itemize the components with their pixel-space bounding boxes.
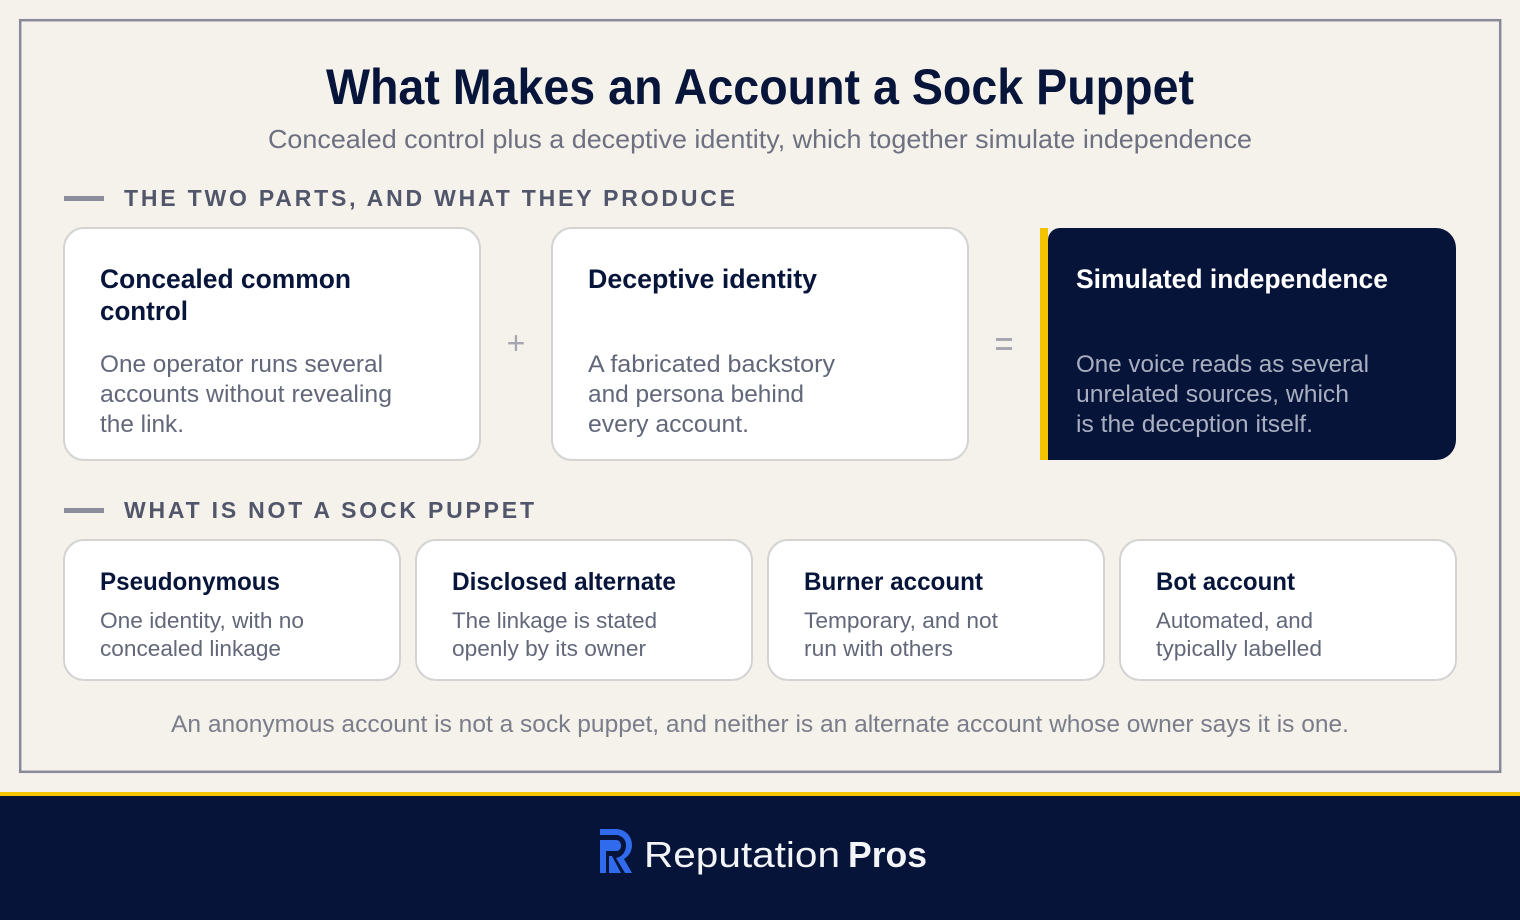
logo [600,829,927,875]
panel: pseudonymous: One identity, with no [100,608,304,633]
wordmark: Reputation [644,834,840,875]
panel: deceptive identity: every account. [588,411,749,438]
panel: disclosed alternate: The linkage is stated [452,608,657,633]
logo: Pros [848,834,927,875]
panel: concealed common control: One operator runs several [100,351,383,378]
panel: pseudonymous: Pseudonymous [100,568,280,596]
panel: simulated independence: One voice reads as several [1076,351,1369,378]
panel: burner account: Burner account [804,568,984,596]
footnote: An anonymous account is not a sock puppet, and neither is an alternate account whose owner says it is one. [171,711,1349,738]
panel: concealed common control: accounts without revealing [100,381,392,408]
panel: pseudonymous: concealed linkage [100,636,281,661]
panel: burner account [768,540,1104,680]
panel: concealed common control: the link. [100,411,184,438]
panel: burner account: run with others [804,636,953,661]
section heading: the two parts: THE TWO PARTS, AND WHAT THEY PRODUCE [124,185,735,211]
panel: simulated independence: unrelated sources, which [1076,381,1349,408]
title: What Makes an Account a Sock Puppet [326,59,1194,115]
panel: concealed common control [64,228,480,460]
panel: deceptive identity: and persona behind [588,381,804,408]
panel: deceptive identity [552,228,968,460]
panel: simulated independence: Simulated independence [1076,264,1388,294]
subtitle: Concealed control plus a deceptive identity, which together simulate independence [268,124,1252,154]
icon: equals [996,338,1012,350]
section heading: what is not a sock puppet: WHAT IS NOT A SOCK PUPPET [124,497,534,523]
panel: simulated independence [1040,228,1456,460]
panel: disclosed alternate [416,540,752,680]
footer band [0,792,1520,920]
frame [20,20,1500,772]
panel: bot account: Automated, and [1156,608,1313,633]
panel: deceptive identity: A fabricated backstory [588,351,836,378]
panel: disclosed alternate: Disclosed alternate [452,568,676,596]
panel: concealed common control: Concealed common [100,264,351,294]
panel: deceptive identity: Deceptive identity [588,264,817,294]
panel: bot account: typically labelled [1156,636,1322,661]
panel: simulated independence: is the deception itself. [1076,411,1313,438]
icon: R mark [600,829,632,873]
panel: bot account: Bot account [1156,568,1296,596]
panel: bot account [1120,540,1456,680]
panel: pseudonymous [64,540,400,680]
icon: plus: + [507,325,525,361]
panel: disclosed alternate: openly by its owner [452,636,646,661]
panel: concealed common control: control [100,296,188,326]
panel: burner account: Temporary, and not [804,608,998,633]
